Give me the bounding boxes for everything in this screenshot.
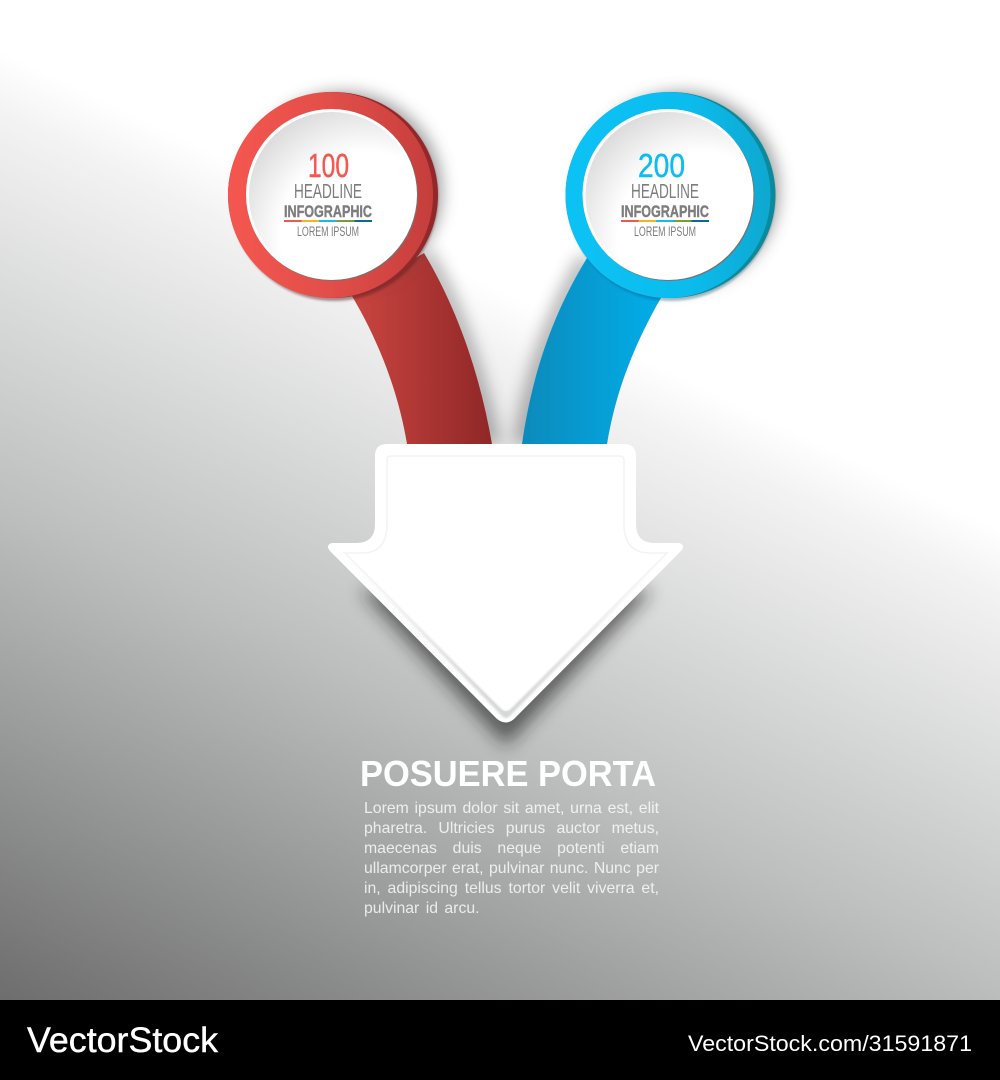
- arrow inner panel: [345, 456, 667, 710]
- arrow body: [328, 444, 683, 722]
- badge subtitle: INFOGRAPHIC: [284, 202, 372, 221]
- badge value: 100: [308, 147, 349, 184]
- ring contact shadow on ribbon: [567, 93, 775, 301]
- badge headline: HEADLINE: [294, 181, 362, 203]
- body text: pulvinar id arcu.: [364, 900, 480, 917]
- footer bar: [0, 1000, 1000, 1080]
- red ribbon with shadow: [352, 250, 501, 444]
- disc rim: [582, 109, 754, 280]
- disc shadow: [584, 110, 754, 281]
- ring contact shadow on ribbon: [230, 93, 438, 301]
- big white arrow: [328, 444, 683, 746]
- body text: ullamcorper erat, pulvinar nunc. Nunc per: [364, 860, 659, 877]
- body text: [364, 800, 659, 917]
- body text: pharetra. Ultricies purus auctor metus,: [364, 820, 659, 837]
- body text: maecenas duis neque potenti etiam: [364, 840, 659, 857]
- disc rim: [246, 109, 417, 280]
- ring edge: teal crescent: [566, 92, 776, 298]
- disc face: [249, 112, 415, 278]
- badge subtitle: INFOGRAPHIC: [621, 202, 709, 221]
- badge value: 200: [638, 147, 685, 184]
- disc face: [586, 112, 752, 278]
- ring edge: dark crescent: [228, 92, 438, 298]
- colour rule: [284, 220, 372, 222]
- body text: in, adipiscing tellus tortor velit viverra et,: [364, 880, 659, 897]
- ring face: [566, 92, 770, 298]
- badge caption: LOREM IPSUM: [634, 224, 696, 239]
- blue circle badge: [566, 92, 779, 301]
- badge headline: HEADLINE: [631, 181, 699, 203]
- badge caption: LOREM IPSUM: [297, 224, 359, 239]
- red circle badge: [228, 92, 442, 301]
- colour rule: [621, 220, 709, 222]
- ring face: [228, 92, 433, 298]
- disc shadow: [247, 110, 418, 281]
- footer brand: VectorStock: [27, 1021, 219, 1060]
- footer url: VectorStock.com/31591871: [688, 1031, 972, 1056]
- arrow bevel: [340, 551, 672, 718]
- body text: Lorem ipsum dolor sit amet, urna est, elit: [364, 800, 659, 817]
- blue ribbon with shadow: [513, 255, 662, 444]
- title: POSUERE PORTA: [360, 753, 656, 794]
